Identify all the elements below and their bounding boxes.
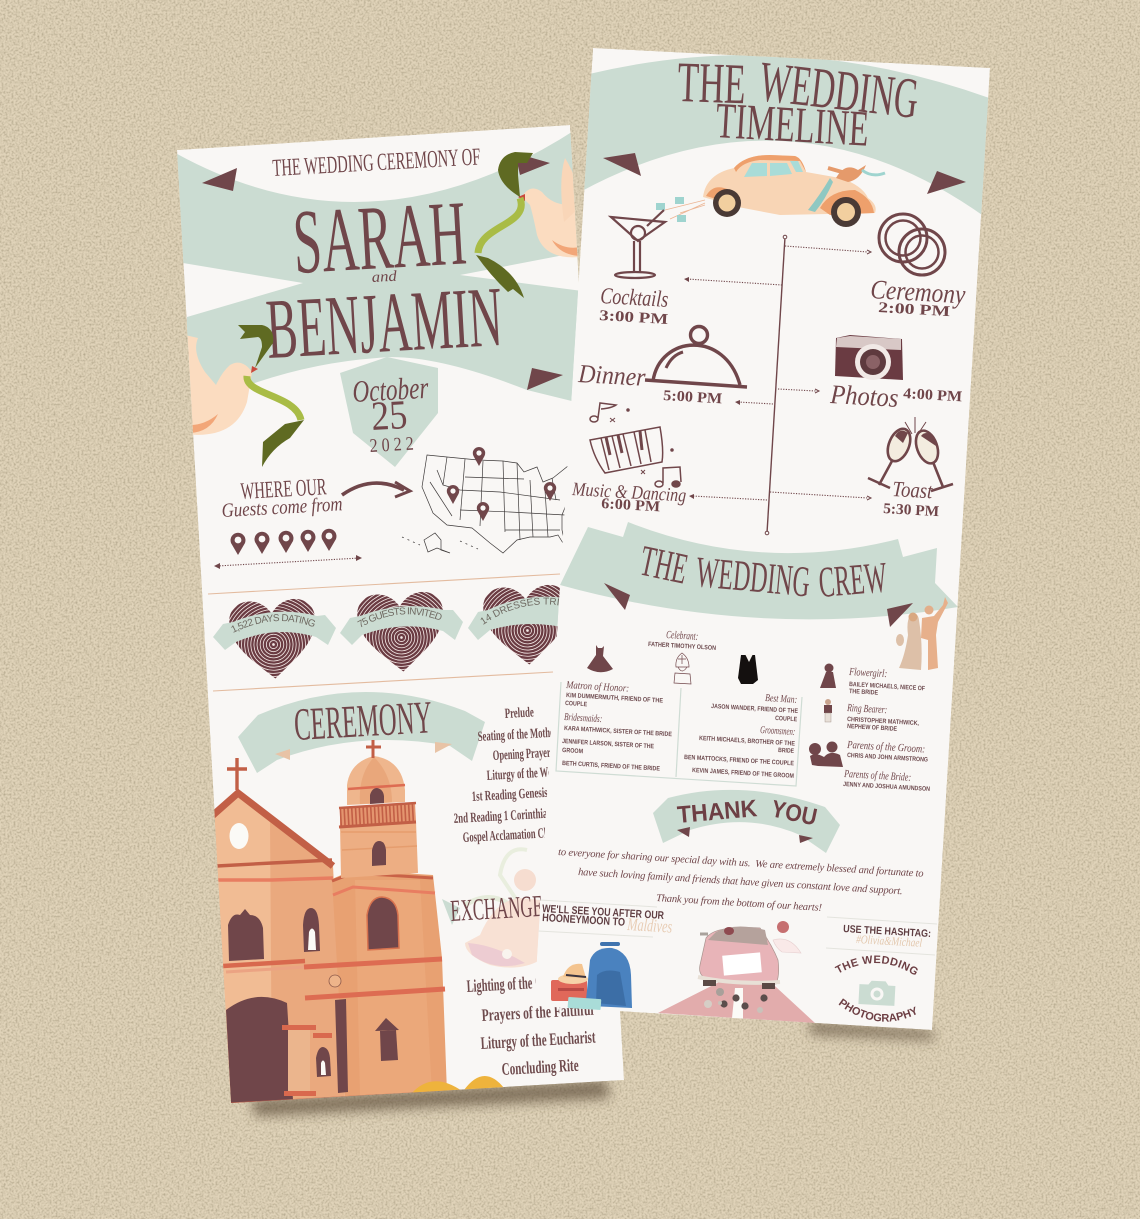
crew text: bride's side: GROOM — [562, 747, 583, 755]
lower ceremony list: Liturgy of the Eucharist — [480, 1028, 597, 1054]
label: music and dancing — [571, 479, 687, 515]
label: photos — [829, 379, 963, 413]
name banner — [177, 133, 578, 401]
crew text: bride's side: Bridesmaids: — [564, 712, 602, 725]
lower ceremony list: Lighting of the Candles — [466, 971, 571, 997]
label: toast — [883, 476, 940, 520]
icon: couple — [896, 597, 948, 670]
big door — [226, 997, 293, 1103]
column and capital — [282, 1025, 332, 1096]
crew text: right column: CHRISTOPHER MATHWICK, — [847, 716, 919, 727]
ceremony order list: Gospel Acclamation Chorus — [462, 824, 565, 845]
hashtag: USE THE HASHTAG: — [843, 923, 931, 940]
icon: toast flutes — [868, 417, 953, 491]
stat: 1,522 days dating — [213, 598, 336, 678]
thank you message: Thank you from the bottom of our hearts! — [656, 893, 823, 914]
heading: where our guests come from — [222, 478, 342, 517]
crew text: bride's side: KIM DUMMERMUTH, FRIEND OF THE — [566, 692, 664, 705]
celebrant — [648, 629, 716, 652]
label: ceremony: Ceremony — [870, 274, 966, 309]
illustration: vintage car — [656, 155, 885, 227]
right tower base — [332, 870, 447, 1100]
page shadows — [250, 1022, 936, 1116]
heading: the wedding timeline: THE — [677, 50, 747, 116]
icon: ring bearer — [824, 699, 832, 722]
honeymoon note — [538, 900, 673, 937]
label: toast: Toast — [892, 476, 934, 503]
label: photos: 4:00 PM — [903, 386, 963, 405]
celebrant: FATHER TIMOTHY OLSON — [648, 641, 716, 652]
icon: flower girl — [820, 664, 836, 688]
ceremony order list — [454, 706, 551, 844]
icon: dove right with ribbon — [476, 152, 582, 298]
label: ceremony: 2:00 PM — [878, 300, 951, 320]
stat: 75 guests invited: 75 GUESTS INVITED — [357, 607, 442, 628]
ceremony order list: Opening Prayer — [492, 744, 551, 763]
honeymoon note: WE'LL SEE YOU AFTER OUR — [542, 903, 664, 922]
dark stripe — [335, 999, 348, 1093]
crew text: groom's side: BRIDE — [778, 747, 795, 755]
date shield: 2022 — [369, 432, 414, 456]
illustration: church — [212, 740, 504, 1106]
crew text: groom's side: Groomsmen: — [760, 725, 795, 738]
banner flags — [604, 583, 913, 627]
name: Sarah: SARAH — [290, 181, 469, 293]
thank you message: have such loving family and friends that have given us constant love and support. — [578, 867, 903, 897]
dotted double arrow — [214, 555, 362, 569]
illustration: getaway car and road — [658, 921, 815, 1023]
tower upper — [340, 822, 418, 878]
tower bands — [304, 873, 445, 998]
left crosses and roof — [212, 758, 345, 1106]
timeline banner — [580, 55, 995, 217]
thank you banner: YOU — [769, 795, 819, 831]
heading: the wedding ceremony of: THE WEDDING CEREMONY OF — [272, 144, 481, 182]
location pins row — [230, 529, 336, 555]
name: Benjamin: BENJAMIN — [264, 268, 505, 377]
crew text: bride's side — [562, 680, 673, 773]
label: cocktails: Cocktails — [600, 283, 669, 312]
crew text: groom's side — [684, 693, 799, 780]
US map with pins — [402, 447, 568, 553]
stat: 14 dresses tried — [468, 584, 560, 664]
ceremony order list: Liturgy of the Word — [486, 763, 561, 783]
celebrant: Celebrant: — [666, 629, 698, 643]
honeymoon note: Maldives — [626, 914, 673, 937]
icon: cloche — [645, 326, 747, 387]
text: and: and — [371, 269, 398, 286]
stat: 14 dresses tried: 14 DRESSES TRIED — [480, 598, 559, 625]
arched window left — [228, 909, 264, 961]
circular window — [329, 975, 341, 987]
small statue niche — [316, 1047, 331, 1077]
crew text: right column: NEPHEW OF BRIDE — [847, 723, 898, 733]
icon: priest — [674, 653, 691, 684]
date shield: 25 — [370, 393, 408, 440]
crew text: right column: Flowergirl: — [848, 666, 887, 680]
icon: dress — [587, 645, 613, 672]
crew text: groom's side: Best Man: — [765, 693, 797, 706]
label: dinner — [577, 359, 723, 407]
honeymoon note: HOONEYMOON TO — [542, 912, 626, 929]
banner flags — [202, 153, 563, 390]
crew text: right column: JENNY AND JOSHUA AMUNDSON — [843, 781, 930, 793]
stat: 75 guests invited — [340, 592, 463, 672]
crew text: right column: THE BRIDE — [849, 688, 879, 697]
crew text: bride's side: Matron of Honor: — [565, 680, 629, 695]
date shield — [340, 357, 438, 467]
date shield: October — [351, 370, 430, 409]
crew text: right column: CHRIS AND JOHN ARMSTRONG — [847, 752, 928, 764]
icon: tuxedo — [738, 654, 758, 684]
crew text: right column: Parents of the Bride: — [843, 768, 911, 784]
label: photos: Photos — [829, 379, 899, 413]
heading: the wedding crew: THE — [636, 536, 692, 594]
label: toast: 5:30 PM — [883, 501, 940, 520]
photographer logo: PHOTOGRAPHY — [838, 998, 916, 1022]
label: cocktails: 3:00 PM — [599, 308, 669, 328]
label: cocktails — [599, 283, 669, 328]
divider lines — [208, 574, 560, 691]
thank you banner — [653, 790, 840, 853]
icon: parents silhouette — [809, 742, 843, 767]
left facade bands — [217, 860, 333, 972]
crew text: groom's side: JASON WANDER, FRIEND OF THE — [711, 703, 799, 715]
heading: the wedding timeline: TIMELINE — [714, 92, 870, 157]
label: music and dancing: Music & Dancing — [571, 479, 687, 507]
crew text: groom's side: COUPLE — [775, 715, 798, 723]
icon: cocktail — [611, 210, 665, 278]
icon: piano and notes — [590, 403, 681, 487]
crew text: bride's side: JENNIFER LARSON, SISTER OF THE — [562, 738, 655, 750]
heading: the wedding crew: CREW — [817, 553, 889, 607]
ceremony order list: 2nd Reading 1 Corinthians — [453, 805, 556, 826]
crew text: groom's side: BEN MATTOCKS, FRIEND OF THE COUPLE — [684, 754, 795, 767]
photographer logo — [834, 956, 918, 1022]
icon: wedding bell — [442, 849, 540, 968]
crew text: bride's side: BETH CURTIS, FRIEND OF THE BRIDE — [562, 760, 661, 773]
label: music and dancing: 6:00 PM — [601, 496, 661, 515]
thank you message — [558, 847, 924, 914]
statue niche upper — [303, 908, 320, 952]
yellow bushes — [411, 1076, 504, 1094]
thank you banner: THANK — [676, 795, 759, 829]
arrow to map — [342, 482, 410, 497]
tower arched window — [367, 897, 399, 950]
label: dinner: 5:00 PM — [663, 388, 723, 407]
heading: where our guests come from: WHERE OUR — [240, 475, 327, 505]
panel: left ceremony page — [177, 125, 624, 1103]
text: exchange: EXCHANGE OF — [450, 888, 569, 928]
banner flags — [603, 153, 966, 194]
lower ceremony list — [466, 971, 597, 1080]
crew text: right column — [843, 666, 930, 793]
stat: 1,522 days dating: 1,522 DAYS DATING — [232, 614, 315, 633]
panel: right timeline page — [536, 48, 990, 1030]
heading: the wedding crew — [636, 536, 889, 607]
icon: wedding rings — [879, 214, 945, 275]
crew text: right column: Ring Bearer: — [846, 702, 887, 716]
icon: luggage — [551, 942, 632, 1010]
crew text: right column: Parents of the Groom: — [846, 739, 925, 755]
crew text: right column: BAILEY MICHAELS, NIECE OF — [849, 681, 925, 692]
timeline axis with dotted arrows — [684, 235, 871, 535]
heading: the wedding crew: WEDDING — [694, 547, 812, 606]
heading: the wedding timeline: WEDDING — [757, 49, 922, 131]
base line — [231, 1091, 463, 1104]
icon: camera — [835, 335, 903, 380]
heading: the wedding timeline — [677, 49, 922, 157]
icon: dove left with ribbon — [185, 325, 304, 467]
ceremony order list: Prelude — [504, 704, 534, 721]
dome and lantern — [347, 740, 405, 805]
heading: where our guests come from: Guests come from — [221, 493, 343, 522]
crew banner — [560, 522, 958, 619]
crew text: bride's side: KARA MATHWICK, SISTER OF THE BRIDE — [564, 725, 673, 738]
label: dinner: Dinner — [577, 359, 647, 392]
ceremony order list: Seating of the Mother — [477, 724, 558, 744]
small roofed window — [375, 1018, 399, 1061]
ceremony banner: CEREMONY — [293, 692, 433, 750]
crew table frame — [556, 682, 802, 786]
ceremony order list: 1st Reading Genesis — [471, 784, 548, 804]
hashtag: #Olivia&Michael — [856, 932, 923, 950]
lower ceremony list: Concluding Rite — [501, 1056, 579, 1080]
crew text: bride's side: COUPLE — [565, 700, 588, 708]
crew text: groom's side: KEITH MICHAELS, BROTHER OF THE — [699, 735, 796, 748]
photographer logo: THE WEDDING — [834, 956, 918, 975]
hashtag — [826, 917, 937, 955]
lower ceremony list: Prayers of the Faithful — [481, 1000, 595, 1026]
thank you message: to everyone for sharing our special day with us. We are extremely blessed and fortunate to — [558, 847, 924, 880]
balcony — [339, 803, 416, 827]
ceremony banner — [238, 692, 485, 773]
crew text: groom's side: KEVIN JAMES, FRIEND OF THE GROOM — [692, 767, 794, 780]
